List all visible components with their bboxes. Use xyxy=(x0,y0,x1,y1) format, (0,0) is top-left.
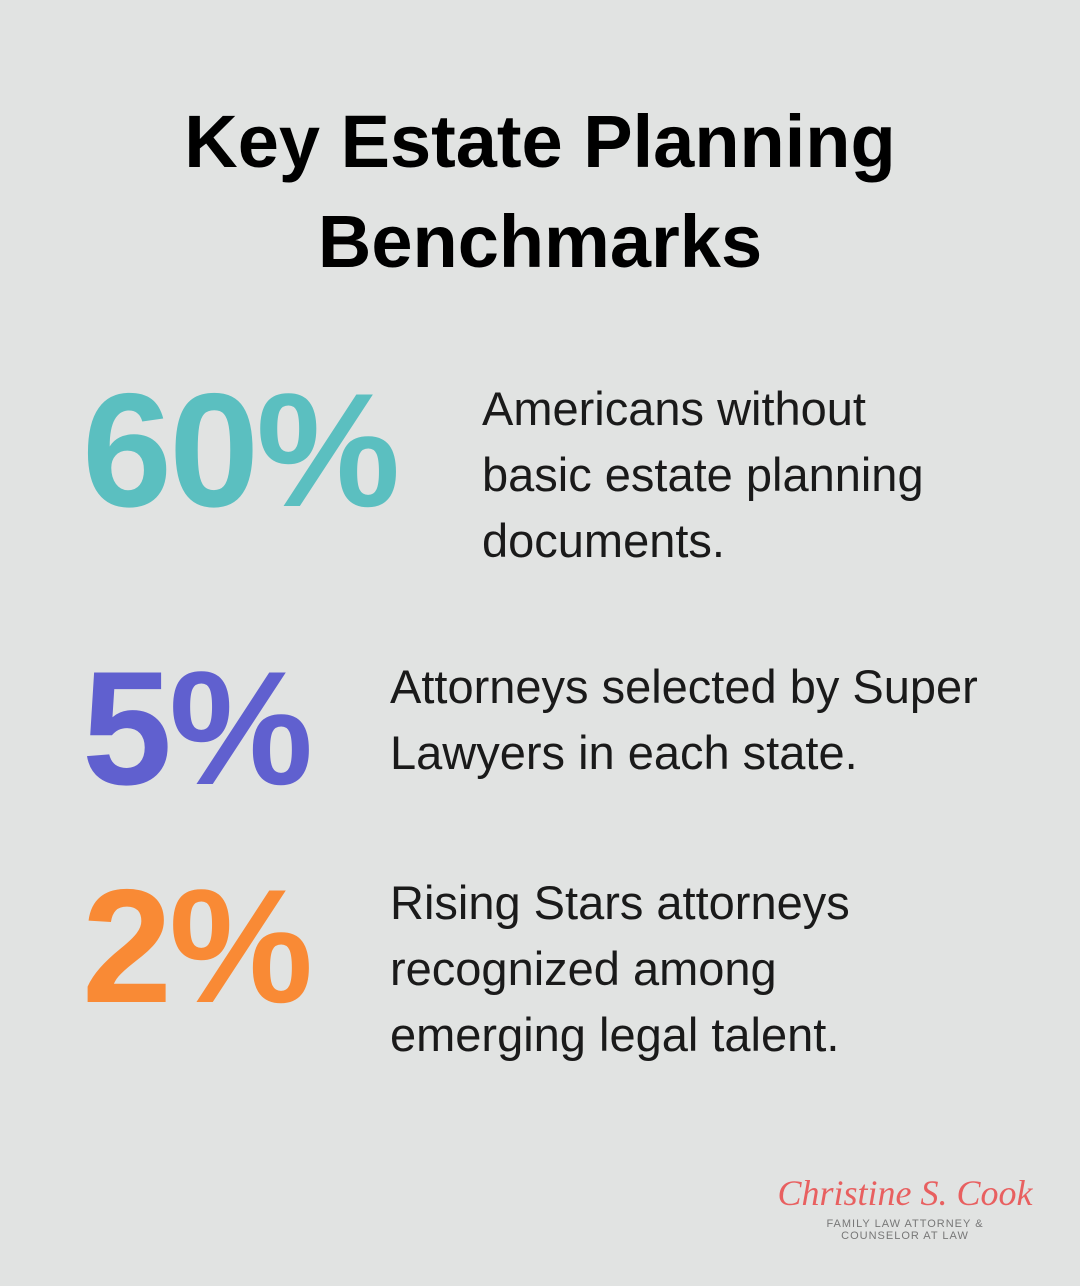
number 2%: 2% xyxy=(82,856,310,1037)
stat: 5% xyxy=(82,638,978,819)
number 60%: 60% xyxy=(82,360,397,541)
logo tagline xyxy=(826,1218,984,1242)
title: Key Estate Planning xyxy=(184,100,896,183)
stat: 2% xyxy=(82,856,850,1061)
logo script name: Christine S. Cook xyxy=(777,1173,1032,1213)
description 5%: Attorneys selected by Super Lawyers in each state. xyxy=(390,660,978,779)
number 5%: 5% xyxy=(82,638,310,819)
description 2%: Rising Stars attorneys recognized among emerging legal talent. xyxy=(390,876,850,1061)
stat: 60% xyxy=(82,360,924,567)
description 60%: Americans without basic estate planning documents. xyxy=(482,382,924,567)
logo tagline: FAMILY LAW ATTORNEY & xyxy=(826,1218,984,1230)
logo xyxy=(777,1173,1033,1242)
title: Benchmarks xyxy=(318,200,762,283)
title xyxy=(184,100,896,283)
logo tagline: COUNSELOR AT LAW xyxy=(841,1230,969,1242)
